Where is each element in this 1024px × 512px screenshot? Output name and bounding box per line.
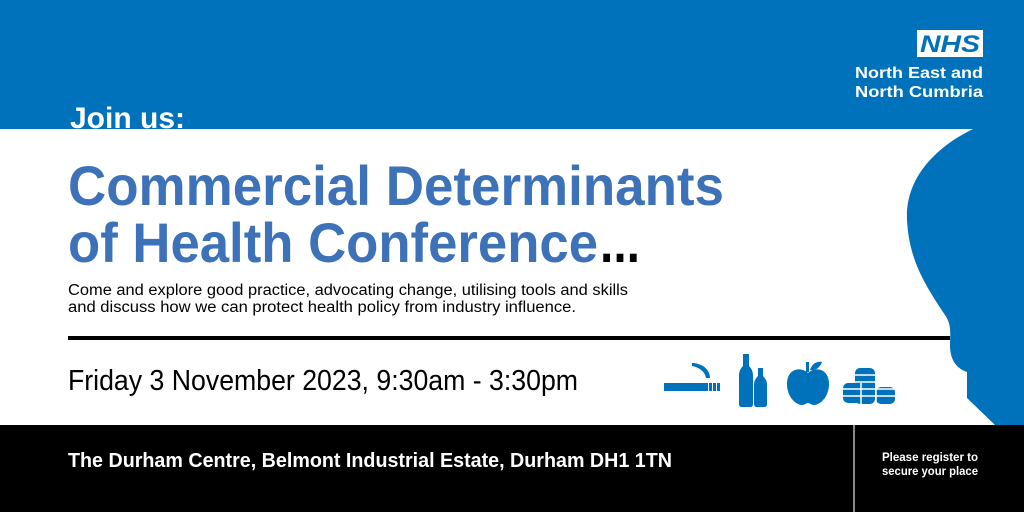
title: Commercial Determinants	[68, 154, 724, 217]
bottom black band	[0, 425, 1024, 512]
register note	[882, 452, 978, 478]
icon: apple	[787, 362, 829, 405]
icon: bottles	[739, 354, 767, 407]
icon: coins	[843, 368, 895, 404]
icon: cigarette	[664, 363, 720, 391]
NHS logo	[855, 30, 983, 101]
NHS logo: North East and	[855, 65, 983, 82]
top blue band	[0, 0, 1024, 129]
title: of Health Conference	[68, 211, 598, 274]
head silhouette	[907, 129, 1024, 425]
address: The Durham Centre, Belmont Industrial Estate, Durham DH1 1TN	[68, 450, 672, 472]
description text: and discuss how we can protect health policy from industry influence.	[68, 299, 576, 316]
NHS logo: NHS	[920, 31, 980, 58]
register note: Please register to	[882, 452, 978, 464]
description text	[68, 282, 628, 316]
title	[68, 154, 724, 274]
description text: Come and explore good practice, advocating change, utilising tools and skills	[68, 282, 628, 299]
heading: join us: Join us:	[70, 102, 185, 135]
title: ...	[600, 211, 640, 274]
register note: secure your place	[882, 466, 978, 478]
date and time: Friday 3 November 2023, 9:30am - 3:30pm	[68, 365, 578, 397]
NHS logo: North Cumbria	[855, 84, 983, 101]
